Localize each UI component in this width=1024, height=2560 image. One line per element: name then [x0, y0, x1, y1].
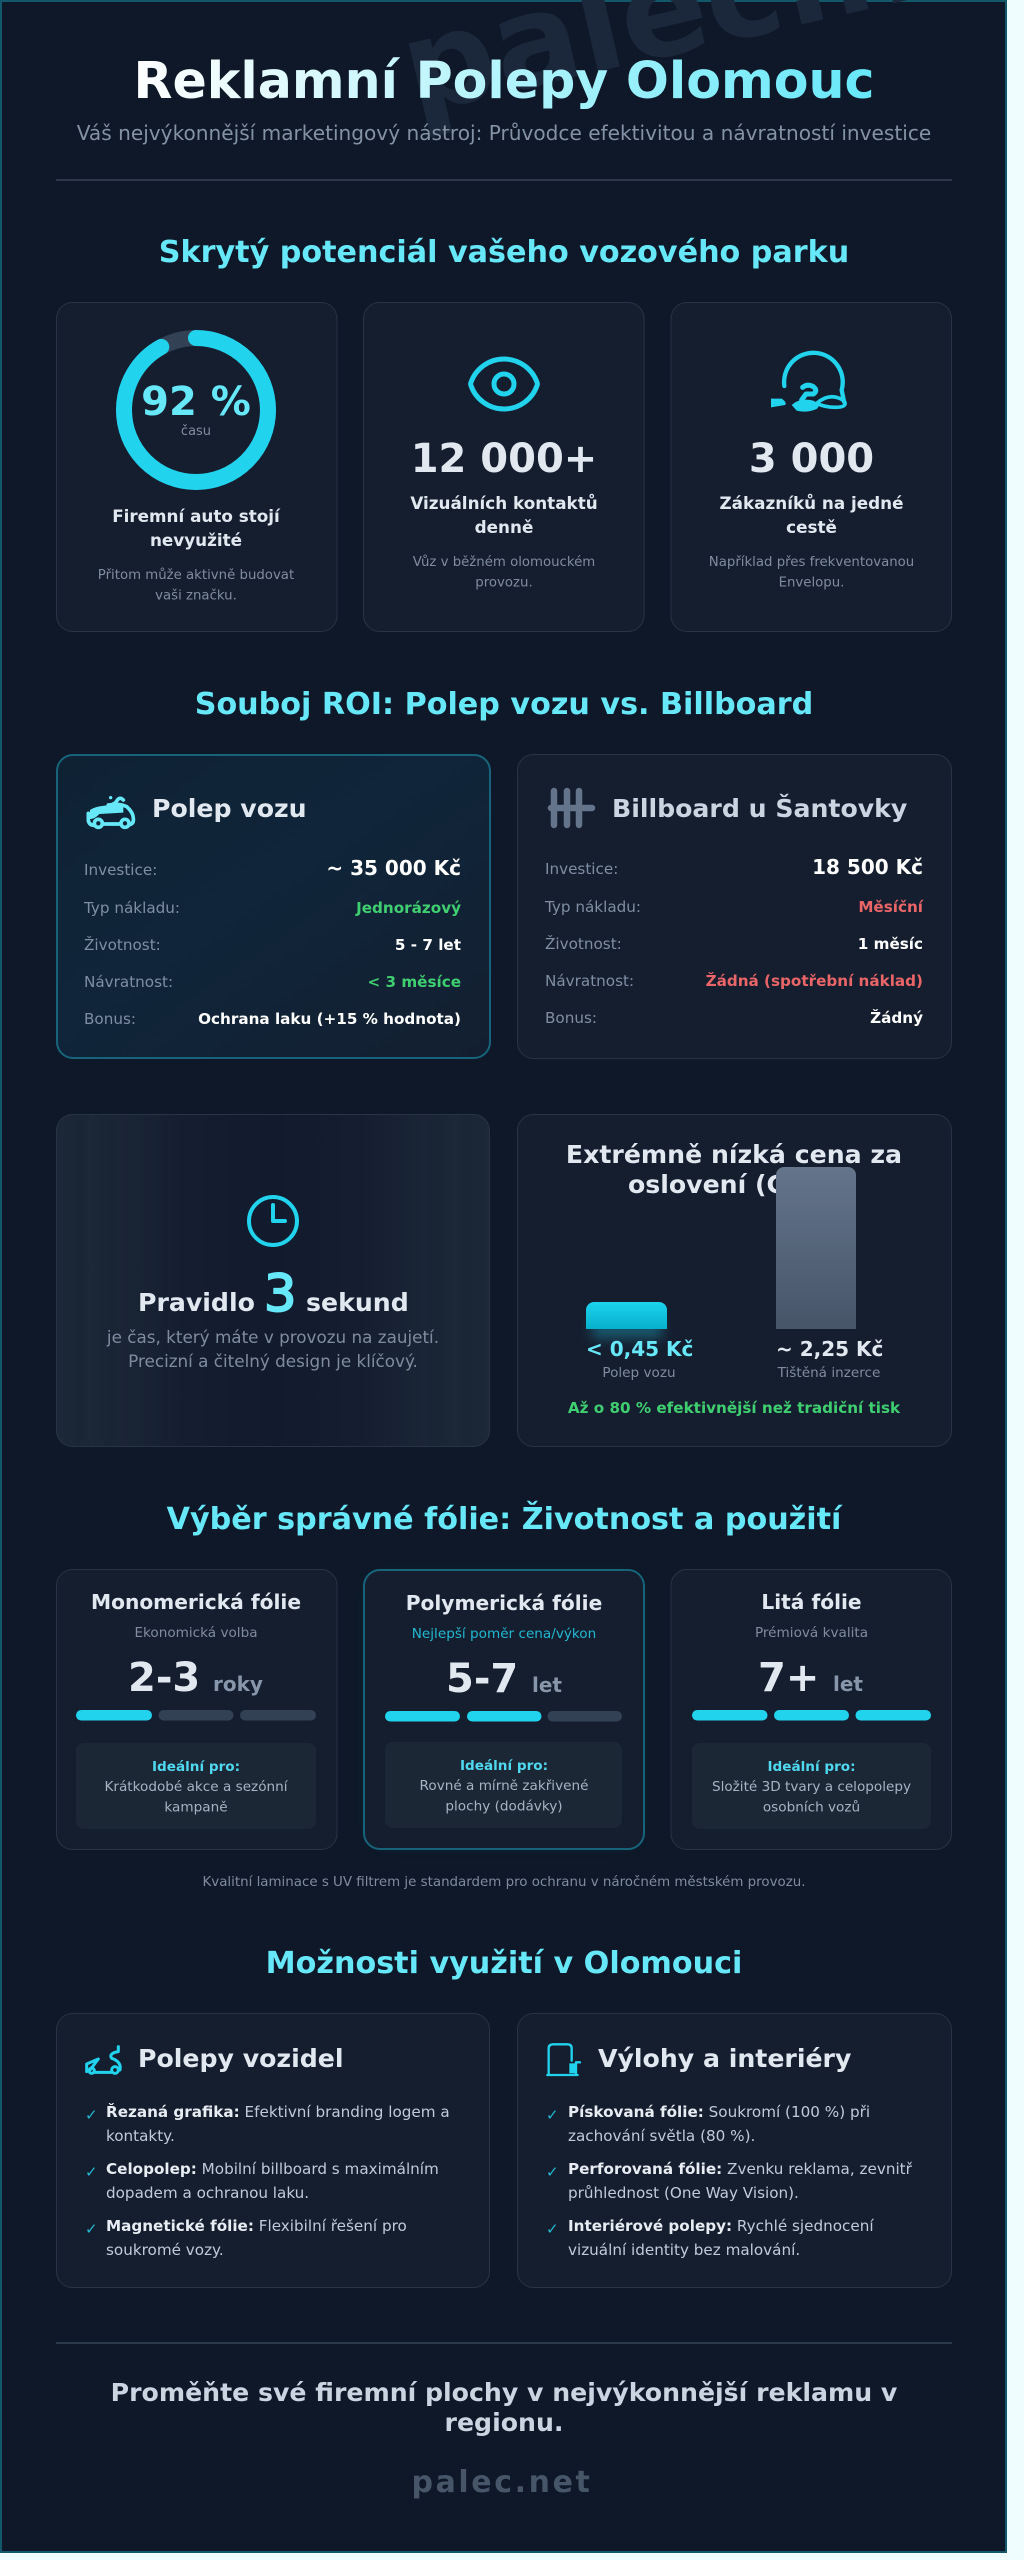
lifespan meter — [692, 1710, 931, 1720]
comparison rows: ~ 35 000 Kč — [326, 856, 461, 880]
list: vehicle options: soukromé vozy. — [106, 2241, 224, 2259]
comparison rows: Návratnost: — [84, 973, 173, 991]
ideal use box: Ideální pro: — [767, 1759, 856, 1775]
stat description: Například přes frekventovanou — [709, 555, 914, 570]
rule heading — [138, 1265, 409, 1324]
comparison rows: Investice: — [545, 860, 618, 878]
list: window options: Pískovaná fólie: Soukromí (100 %) při — [568, 2103, 870, 2121]
film title: Litá fólie — [761, 1590, 862, 1614]
icon: small car — [87, 2047, 120, 2073]
stat value: 12 000+ — [411, 436, 597, 482]
chart title: Extrémně nízká cena za — [566, 1140, 902, 1169]
comparison rows: Typ nákladu: — [544, 898, 641, 916]
film subtitle: Prémiová kvalita — [755, 1625, 868, 1641]
ideal use box: kampaně — [164, 1800, 228, 1816]
film subtitle: Nejlepší poměr cena/výkon — [412, 1626, 596, 1642]
lifespan: let — [833, 1672, 863, 1696]
rule description: Precizní a čitelný design je klíčový. — [128, 1351, 418, 1371]
ideal use box: Ideální pro: — [152, 1759, 240, 1775]
list: window options: Interiérové polepy: Rychlé sjednocení — [568, 2217, 874, 2235]
film title: Monomerická fólie — [91, 1590, 301, 1614]
icon: eye — [471, 359, 537, 409]
lifespan meter — [76, 1710, 316, 1720]
panel: vehicle wraps — [56, 2014, 490, 2288]
stat label: nevyužité — [150, 530, 242, 550]
bar value: print: ~ 2,25 Kč — [776, 1337, 883, 1361]
comparison rows: 1 měsíc — [858, 935, 923, 953]
lifespan: 2-3 — [128, 1655, 200, 1701]
ideal use box — [692, 1743, 931, 1829]
stat description: Vůz v běžném olomouckém — [413, 555, 595, 570]
lifespan — [758, 1655, 863, 1701]
heading: uses in Olomouc: Možnosti využití v Olomouci — [266, 1946, 742, 1981]
bar value: vehicle wrap: < 0,45 Kč — [586, 1337, 693, 1361]
panel: polymeric film — [364, 1570, 644, 1849]
list: window options: Perforovaná fólie: Zvenku reklama, zevnitř — [568, 2160, 913, 2178]
list: window options: ✓ — [546, 2106, 559, 2124]
list: vehicle options: Celopolep: Mobilní billboard s maximálním — [106, 2160, 439, 2178]
card title: Billboard u Šantovky — [612, 793, 907, 823]
film subtitle: Ekonomická volba — [134, 1625, 258, 1641]
bar chart — [586, 1167, 883, 1381]
heading: ROI duel: Souboj ROI: Polep vozu vs. Billboard — [195, 687, 813, 722]
lifespan: 7+ — [758, 1655, 819, 1701]
comparison rows: Měsíční — [858, 898, 924, 916]
title: Reklamní Polepy Olomouc — [134, 51, 874, 110]
stat label: Zákazníků na jedné — [720, 493, 903, 513]
panel: idle time stat — [56, 302, 337, 632]
comparison rows: Ochrana laku (+15 % hodnota) — [198, 1010, 461, 1028]
panel: cast film — [671, 1570, 952, 1850]
icon: clock — [249, 1197, 297, 1245]
closing call to action: Proměňte své firemní plochy v nejvýkonnější reklamu v — [111, 2378, 897, 2407]
comparison rows: Bonus: — [84, 1010, 136, 1028]
panel: shop windows — [518, 2014, 952, 2288]
panel: monomeric film — [56, 1570, 337, 1850]
list: window options: zachování světla (80 %). — [568, 2127, 755, 2145]
rule description: je čas, který máte v provozu na zaujetí. — [107, 1327, 439, 1347]
panel: cost per contact — [518, 1114, 952, 1446]
comparison rows — [83, 856, 461, 1028]
card title: Polep vozu — [152, 794, 307, 823]
ideal use box: Krátkodobé akce a sezónní — [104, 1779, 288, 1795]
bar: vehicle wrap — [586, 1302, 667, 1338]
list: vehicle options: Magnetické fólie: Flexibilní řešení pro — [106, 2217, 407, 2235]
stat value: 3 000 — [749, 436, 874, 482]
closing call to action — [111, 2378, 898, 2437]
list: vehicle options: kontakty. — [106, 2127, 175, 2145]
comparison rows: Bonus: — [545, 1009, 597, 1027]
ideal use box: Rovné a mírně zakřivené — [420, 1778, 588, 1794]
lifespan — [446, 1656, 562, 1702]
list: window options: ✓ — [546, 2163, 559, 2181]
list: vehicle options: ✓ — [85, 2106, 98, 2124]
list: window options: průhlednost (One Way Vision). — [568, 2184, 799, 2202]
heading: hidden potential: Skrytý potenciál vašeho vozového parku — [159, 235, 849, 270]
comparison rows: Životnost: — [545, 934, 622, 953]
closing call to action: regionu. — [445, 2408, 563, 2437]
lifespan: 5-7 — [446, 1656, 518, 1702]
card title: Polepy vozidel — [138, 2044, 343, 2073]
panel: vehicle wrap comparison — [57, 755, 490, 1058]
stat description: provozu. — [475, 576, 533, 590]
comparison rows: 5 - 7 let — [395, 936, 461, 954]
card title: Výlohy a interiéry — [598, 2044, 851, 2073]
stat label: Firemní auto stojí — [112, 506, 280, 526]
comparison rows: Investice: — [84, 861, 157, 879]
list: window options: ✓ — [546, 2220, 559, 2238]
lifespan meter — [385, 1711, 622, 1722]
stat description: vaši značku. — [155, 588, 237, 604]
ideal use box — [385, 1742, 622, 1828]
panel: customers stat — [671, 302, 952, 632]
ideal use box: osobních vozů — [763, 1800, 860, 1816]
rule heading: sekund — [306, 1288, 409, 1317]
stat description: Envelopu. — [779, 576, 844, 590]
stat label: denně — [475, 517, 533, 537]
panel: visual contacts stat — [364, 302, 644, 632]
panel: billboard comparison — [518, 754, 952, 1058]
lifespan — [128, 1655, 263, 1701]
ideal use box: Složité 3D tvary a celopolepy — [712, 1779, 911, 1795]
comparison rows: Návratnost: — [545, 972, 634, 990]
comparison rows: Žádný — [870, 1008, 923, 1027]
icon: car — [88, 796, 133, 827]
chart conclusion: Až o 80 % efektivnější než tradiční tisk — [568, 1399, 901, 1417]
list: vehicle options: Řezaná grafika: Efektivní branding logem a — [106, 2102, 450, 2121]
icon: customers — [771, 353, 845, 412]
list: vehicle options — [85, 2102, 450, 2259]
rule heading: Pravidlo — [138, 1288, 255, 1317]
comparison rows: Žádná (spotřební náklad) — [706, 971, 923, 990]
comparison rows: < 3 měsíce — [367, 973, 461, 991]
donut chart: 92 % — [124, 338, 268, 482]
list: vehicle options: ✓ — [85, 2163, 98, 2181]
comparison rows — [544, 855, 924, 1027]
bar: print — [776, 1167, 856, 1329]
bar label: vehicle wrap: Polep vozu — [602, 1365, 676, 1381]
heading: film choice: Výběr správné fólie: Životnost a použití — [167, 1501, 843, 1537]
panel: 3 second rule — [56, 1114, 490, 1446]
stat description: Přitom může aktivně budovat — [98, 568, 294, 583]
comparison rows: 18 500 Kč — [812, 855, 923, 879]
donut value: 92 % — [141, 379, 251, 425]
stat label: cestě — [786, 517, 837, 537]
chart title: oslovení (CPM) — [628, 1170, 840, 1199]
donut unit: času — [181, 424, 211, 439]
stat label: Vizuálních kontaktů — [410, 493, 598, 513]
list: window options — [546, 2103, 913, 2259]
footer logo: palec.net — [412, 2465, 592, 2500]
list: window options: vizuální identity bez malování. — [568, 2241, 800, 2259]
lifespan: roky — [213, 1672, 263, 1696]
comparison rows: Jednorázový — [355, 899, 461, 917]
comparison rows: Životnost: — [84, 935, 161, 954]
lamination note: Kvalitní laminace s UV filtrem je standardem pro ochranu v náročném městském provozu. — [203, 1874, 805, 1890]
ideal use box: Ideální pro: — [460, 1758, 548, 1774]
list: vehicle options: dopadem a ochranou laku. — [106, 2184, 309, 2202]
comparison rows: Typ nákladu: — [83, 899, 180, 917]
ideal use box — [76, 1743, 316, 1829]
lifespan: let — [532, 1673, 562, 1697]
list: vehicle options: ✓ — [85, 2220, 98, 2238]
film title: Polymerická fólie — [406, 1591, 602, 1615]
subtitle: Váš nejvýkonnější marketingový nástroj: Průvodce efektivitou a návratností investice — [77, 121, 931, 145]
bar label: print: Tištěná inzerce — [777, 1365, 880, 1381]
rule heading: 3 — [264, 1265, 296, 1324]
icon: door — [547, 2044, 580, 2075]
icon: billboard — [551, 791, 592, 825]
ideal use box: plochy (dodávky) — [445, 1798, 563, 1814]
